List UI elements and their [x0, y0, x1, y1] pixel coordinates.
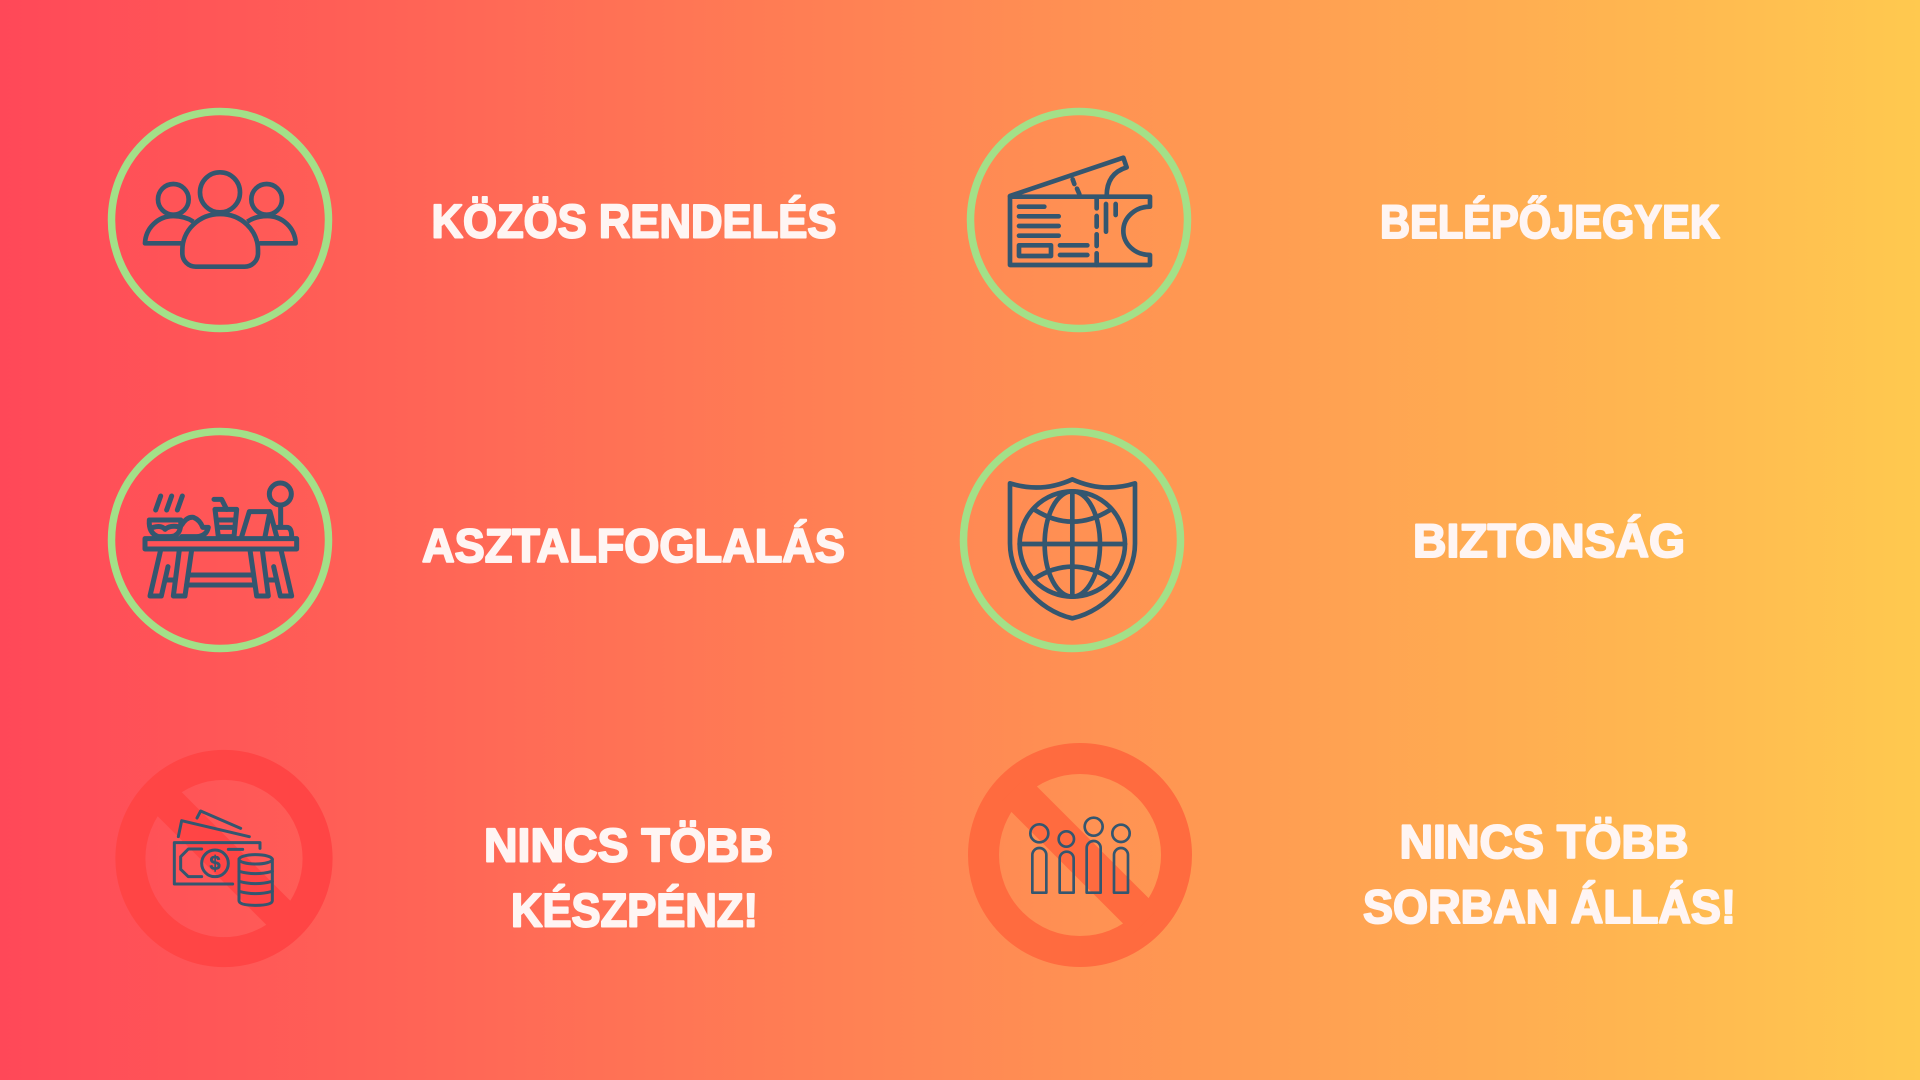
icon: restaurant table: [145, 483, 297, 596]
icon: ticket: [1010, 158, 1150, 265]
icon ring: biztonság: [964, 432, 1180, 648]
icon ring: belépőjegyek: [970, 112, 1188, 328]
label: nincs több: NINCS TÖBB: [1400, 815, 1688, 868]
panel: biztonság: [964, 432, 1685, 648]
panel: nincs több készpénz: [130, 765, 773, 952]
panel: nincs több sorban állás: [984, 758, 1736, 952]
label: asztalfoglalás: ASZTALFOGLALÁS: [422, 519, 845, 572]
label: közös rendelés: KÖZÖS RENDELÉS: [432, 194, 836, 248]
label: belépőjegyek: BELÉPŐJEGYEK: [1380, 195, 1720, 248]
icon: banknotes and coins: [174, 811, 272, 905]
dollar sign: $: [209, 853, 221, 875]
prohibition sign: cash: [130, 765, 318, 952]
icon: shield with globe: [1010, 479, 1135, 618]
panel: asztalfoglalás: [112, 432, 845, 648]
panel: belépőjegyek: [970, 112, 1720, 328]
icon: people in queue: [1030, 818, 1130, 893]
icon ring: közös rendelés: [112, 112, 328, 328]
panel: közös rendelés: [112, 112, 836, 328]
label: sorban állás: SORBAN ÁLLÁS!: [1363, 880, 1736, 933]
prohibition sign: queue: [984, 758, 1176, 952]
label: készpénz line: KÉSZPÉNZ!: [511, 884, 758, 936]
icon ring: asztalfoglalás: [112, 432, 328, 648]
icon: group of people: [145, 172, 296, 267]
label: biztonság: BIZTONSÁG: [1413, 514, 1685, 567]
label: nincs több készpénz: NINCS TÖBB: [484, 818, 773, 872]
